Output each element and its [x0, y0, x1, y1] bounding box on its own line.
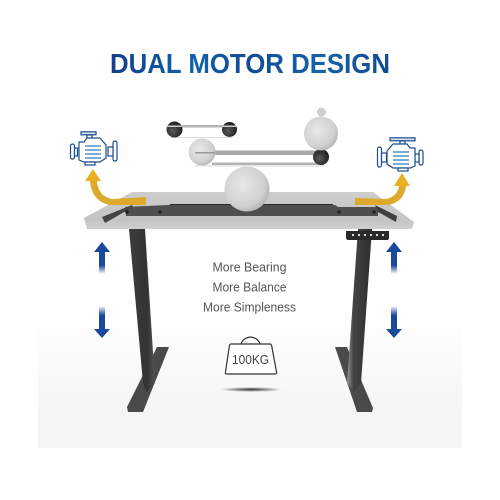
blue arrows right — [386, 242, 402, 338]
yellow arrow right — [355, 173, 410, 205]
feature text: More Bearing — [212, 260, 287, 274]
blue arrows left — [94, 242, 110, 338]
controller — [346, 231, 389, 240]
feature text: More Simpleness — [203, 300, 296, 314]
left leg — [127, 229, 169, 412]
yellow arrow left — [85, 169, 146, 205]
icon: 100KG weight — [225, 337, 277, 374]
icon: left motor — [70, 132, 117, 165]
desk beam — [102, 204, 397, 223]
feature text: More Balance — [212, 280, 287, 294]
center ball — [224, 166, 270, 212]
desk top — [84, 192, 414, 229]
weight shadow — [220, 387, 282, 392]
icon: 100KG weight: 100KG — [232, 353, 269, 367]
balance illustration: middle beam — [188, 108, 338, 166]
right leg — [335, 229, 373, 412]
background panel — [38, 0, 462, 448]
feature text — [203, 260, 296, 314]
title: DUAL MOTOR DESIGN — [110, 48, 390, 79]
icon: right motor — [378, 138, 423, 171]
balance illustration: small balls — [166, 122, 237, 138]
